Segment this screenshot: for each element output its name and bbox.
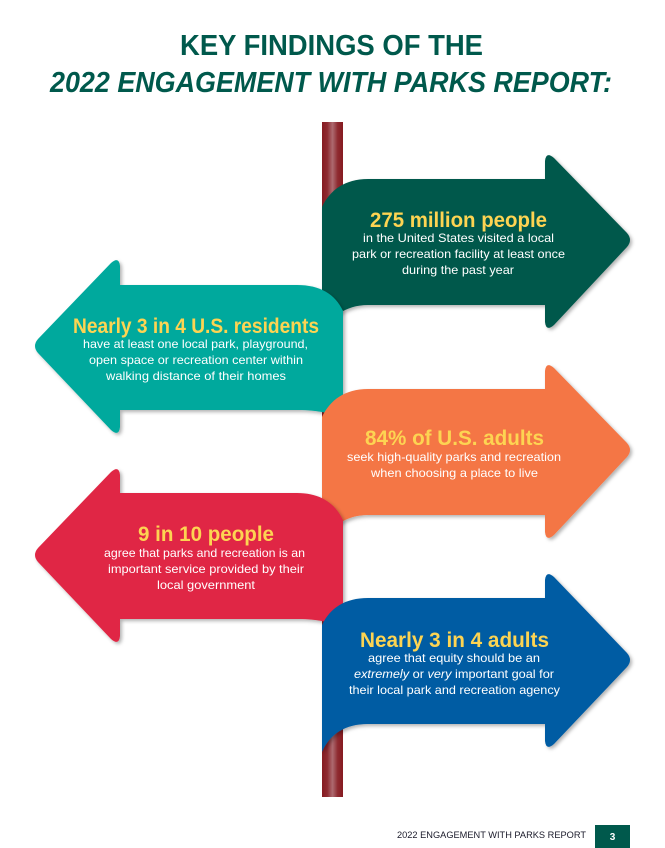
page number xyxy=(595,825,630,848)
page number: 3 xyxy=(610,832,616,843)
arrow: nearly 3 in 4 U.S. residents: walking distance of their homes xyxy=(105,369,286,383)
arrow: 275 million people: in the United States visited a local xyxy=(363,231,554,245)
arrow: 275 million people: 275 million people xyxy=(370,209,547,232)
arrow: 9 in 10 people: agree that parks and recreation is an xyxy=(104,546,305,560)
footer report name: 2022 ENGAGEMENT WITH PARKS REPORT xyxy=(397,830,586,841)
arrow: 9 in 10 people xyxy=(35,469,343,642)
arrow: 9 in 10 people: local government xyxy=(157,578,256,592)
arrow: 275 million people: park or recreation facility at least once xyxy=(352,247,565,261)
title xyxy=(49,30,612,99)
arrow: nearly 3 in 4 U.S. residents xyxy=(35,260,343,433)
arrow: nearly 3 in 4 adults xyxy=(322,574,630,752)
arrow: nearly 3 in 4 adults: agree that equity should be an xyxy=(368,651,540,665)
arrow: 84% of U.S. adults: 84% of U.S. adults xyxy=(365,427,544,450)
arrow: 9 in 10 people: 9 in 10 people xyxy=(138,523,274,546)
arrow: 84% of U.S. adults: when choosing a place to live xyxy=(370,466,538,480)
arrow: nearly 3 in 4 adults: their local park and recreation agency xyxy=(349,683,560,697)
arrow: nearly 3 in 4 U.S. residents: have at least one local park, playground, xyxy=(83,337,308,351)
title: 2022 ENGAGEMENT WITH PARKS REPORT: xyxy=(49,67,612,99)
arrow: 84% of U.S. adults xyxy=(322,365,630,543)
arrow: 9 in 10 people: important service provided by their xyxy=(108,562,304,576)
title: KEY FINDINGS OF THE xyxy=(180,30,483,62)
arrow: nearly 3 in 4 adults: extremely or very important goal for xyxy=(354,667,554,681)
arrow: nearly 3 in 4 adults: Nearly 3 in 4 adults xyxy=(360,629,549,652)
signpost pole xyxy=(322,122,343,797)
arrow: 84% of U.S. adults: seek high-quality parks and recreation xyxy=(347,450,561,464)
arrow: 275 million people: during the past year xyxy=(402,263,514,277)
arrow: nearly 3 in 4 U.S. residents: open space or recreation center within xyxy=(89,353,303,367)
arrow: 275 million people xyxy=(322,155,630,333)
arrow: nearly 3 in 4 U.S. residents: Nearly 3 in 4 U.S. residents xyxy=(73,315,319,338)
